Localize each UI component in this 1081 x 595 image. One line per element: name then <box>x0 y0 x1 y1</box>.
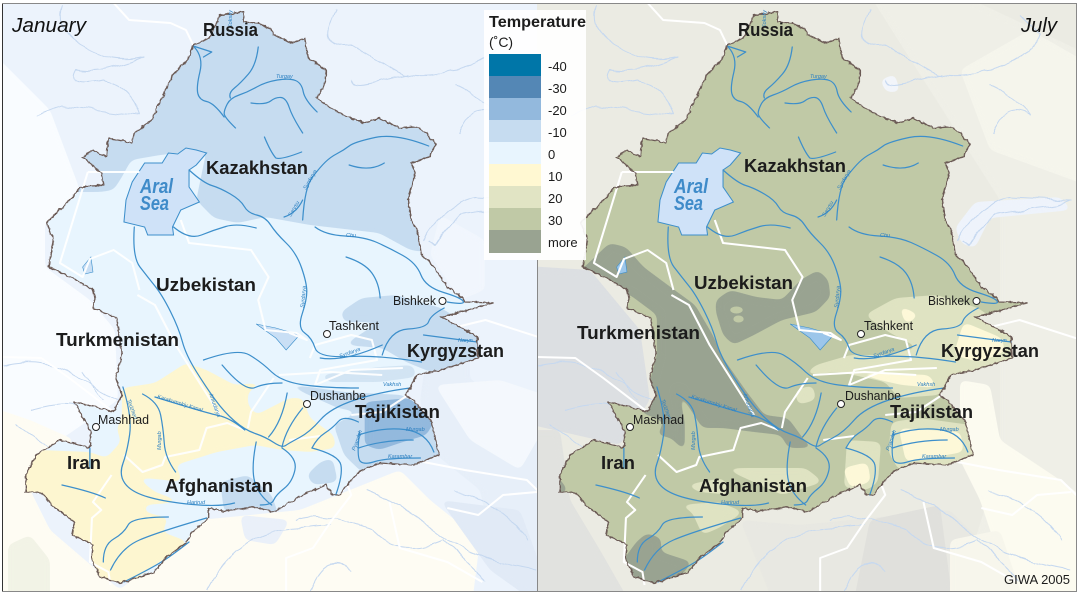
river names: January: Kokshy <box>228 9 234 28</box>
cities: January <box>92 293 446 430</box>
legend title: Temperature <box>489 14 586 31</box>
river names: January: Pyandzh <box>351 430 364 452</box>
legend values: 0 <box>548 147 555 162</box>
legend values: -40 <box>548 59 567 74</box>
country labels: July: Uzbekistan <box>694 273 793 293</box>
legend title <box>489 14 586 50</box>
river names: July: Karakumskiy Kanal <box>690 394 738 414</box>
outside rivers and borders: January <box>3 3 547 591</box>
river names: January: Syrdarya <box>339 347 361 360</box>
river names: January: Turgay <box>276 74 294 80</box>
country labels: January <box>56 20 504 496</box>
river names: July: Tedzhen <box>659 399 672 420</box>
cities: July: Dushanbe <box>845 388 901 403</box>
panel: July map <box>510 0 1081 595</box>
borders and rivers: January <box>26 12 493 585</box>
country labels: January: Uzbekistan <box>156 275 256 295</box>
river names: January: Chu <box>346 233 356 239</box>
background: July surroundings <box>510 0 1081 595</box>
label: Aral Sea, January: Sea <box>140 193 169 215</box>
legend values: more <box>548 235 578 250</box>
river names: January: Sarysu <box>288 200 301 218</box>
river names: July: Murgab <box>691 431 697 450</box>
credit: GIWA 2005 <box>1004 572 1070 587</box>
heading: July: July <box>1020 14 1059 37</box>
label: Aral Sea, July: Sea <box>674 193 703 215</box>
river names: January: Murgab <box>157 431 163 450</box>
river names: July: Naryn <box>992 338 1007 344</box>
river names: July <box>659 9 1007 506</box>
label: Aral Sea, January <box>139 176 173 215</box>
river names: January: Karambar <box>388 454 413 460</box>
heading: January: January <box>11 14 88 37</box>
country labels: January: Kyrgyzstan <box>407 341 504 361</box>
river names: July: Amudarya <box>741 392 755 418</box>
legend title: (˚C) <box>489 34 513 50</box>
legend values: 30 <box>548 213 562 228</box>
country labels: July: Tajikistan <box>890 402 973 422</box>
outside rivers and borders: July <box>537 3 1081 591</box>
country labels: January: Russia <box>203 20 259 40</box>
river names: January: Murgab <box>406 427 425 433</box>
country labels: July: Afghanistan <box>699 476 807 496</box>
legend values: -20 <box>548 103 567 118</box>
river names: July: Vakhsh <box>917 382 935 388</box>
cities: July: Bishkek <box>928 293 970 308</box>
river names: July: Kokshy <box>762 9 768 28</box>
river names: July: Murgab <box>940 427 959 433</box>
river names: January: Syrdarya <box>303 169 319 191</box>
cities: July: Mashhad <box>633 412 684 427</box>
label: Aral Sea, July <box>673 176 708 215</box>
legend: temperature scale <box>484 10 586 260</box>
country labels: July: Kazakhstan <box>744 156 846 176</box>
lakes: July <box>617 148 834 350</box>
borders and rivers: July <box>560 12 1027 585</box>
country labels: July <box>577 20 1039 496</box>
label: Aral Sea, July: Aral <box>673 176 708 198</box>
river names: January: Harirud <box>187 500 206 506</box>
country labels: January: Afghanistan <box>165 476 273 496</box>
country labels: July: Iran <box>601 453 635 473</box>
river names: July: Syrdarya <box>873 347 895 360</box>
legend values <box>548 59 578 250</box>
country labels: July: Turkmenistan <box>577 323 700 343</box>
panel: January map <box>0 0 560 595</box>
river names: January <box>125 9 473 506</box>
label: Aral Sea, January: Aral <box>139 176 173 198</box>
basin: July temperature zones <box>560 12 1024 583</box>
background: January surroundings <box>0 0 560 595</box>
legend values: 10 <box>548 169 562 184</box>
country labels: January: Tajikistan <box>355 402 440 422</box>
river names: January: Karakumskiy Kanal <box>156 394 204 414</box>
river names: July: Syrdarya <box>837 169 853 191</box>
lakes: January <box>83 148 300 350</box>
cities: January: Bishkek <box>393 293 436 308</box>
river names: July: Sarysu <box>822 200 835 218</box>
river names: January: Naryn <box>458 338 473 344</box>
river names: January: Tedzhen <box>125 399 138 420</box>
country labels: July: Kyrgyzstan <box>941 341 1039 361</box>
river names: July: Pyandzh <box>885 430 898 452</box>
river names: July: Turgay <box>810 74 828 80</box>
country labels: January: Iran <box>67 453 101 473</box>
river names: January: Syrdarya <box>300 286 308 308</box>
cities: July: Tashkent <box>864 318 913 333</box>
cities: January: Mashhad <box>98 412 149 427</box>
river names: July: Syrdarya <box>834 286 842 308</box>
legend values: -30 <box>548 81 567 96</box>
cities: January: Dushanbe <box>310 388 366 403</box>
river names: July: Karambar <box>922 454 947 460</box>
country labels: July: Russia <box>738 20 794 40</box>
river names: July: Harirud <box>721 500 740 506</box>
river names: January: Vakhsh <box>383 382 401 388</box>
country labels: January: Kazakhstan <box>206 158 308 178</box>
legend colour swatches <box>489 54 541 253</box>
basin: January temperature zones <box>26 12 478 583</box>
river names: July: Chu <box>880 233 890 239</box>
country labels: January: Turkmenistan <box>56 330 179 350</box>
legend values: 20 <box>548 191 562 206</box>
legend values: -10 <box>548 125 567 140</box>
cities: July <box>626 293 980 430</box>
river names: January: Amudarya <box>207 392 221 418</box>
cities: January: Tashkent <box>329 318 379 333</box>
